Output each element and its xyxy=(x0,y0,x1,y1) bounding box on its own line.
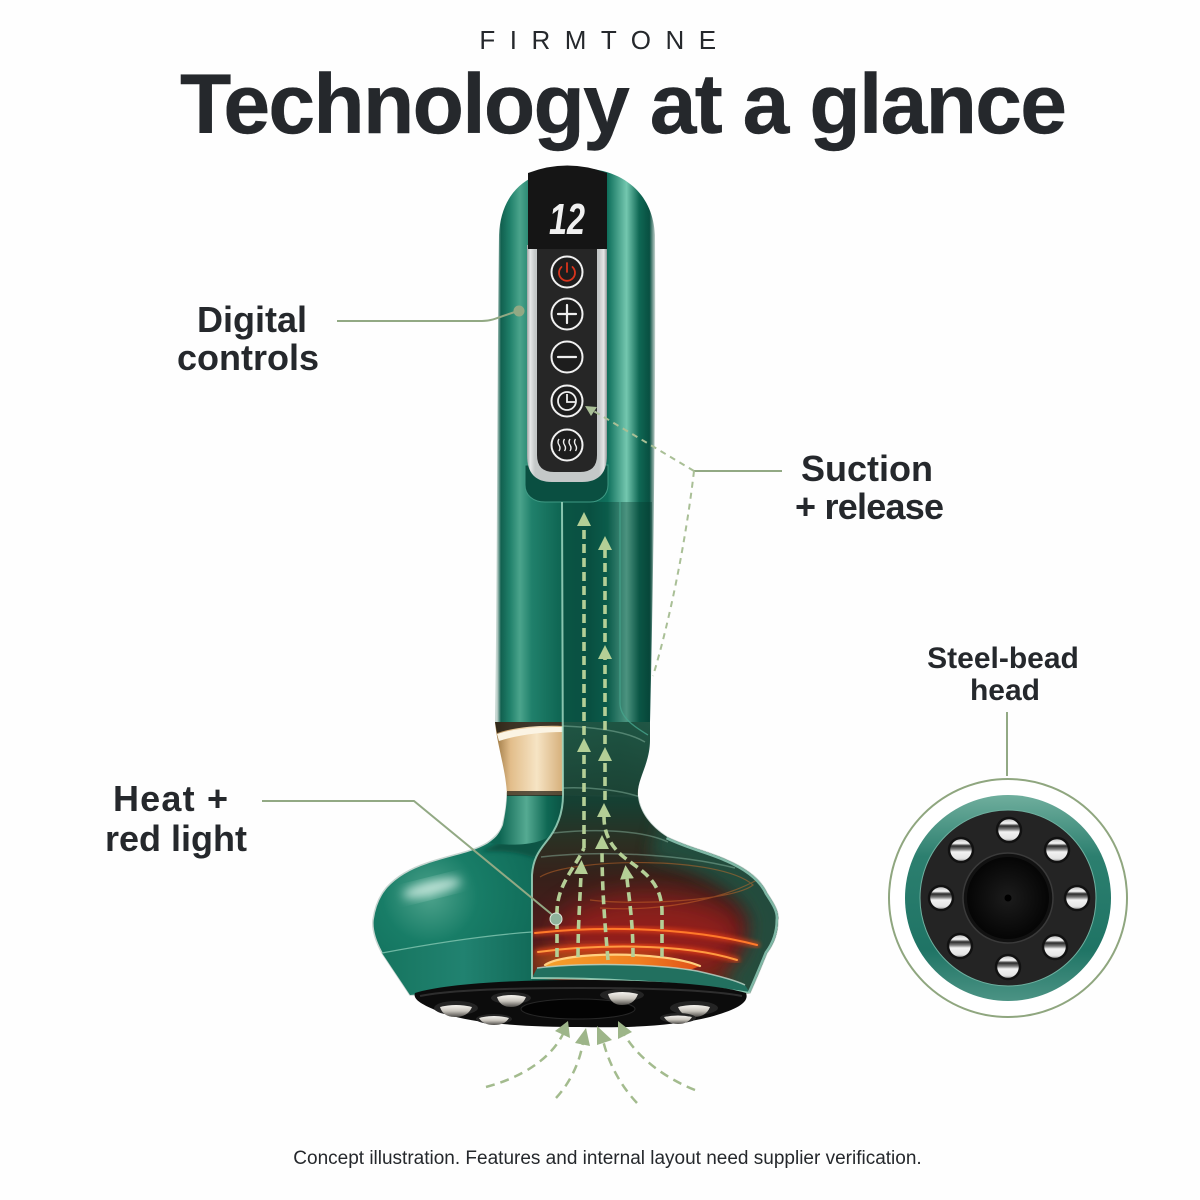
chamber contours xyxy=(541,726,735,868)
product: massager device xyxy=(373,166,790,1027)
dashed leader to chamber xyxy=(653,471,694,676)
title: Technology at a glance xyxy=(180,57,1065,151)
panel recess xyxy=(525,465,608,502)
leader arrowhead xyxy=(585,406,597,416)
dashed leader to panel xyxy=(592,410,694,471)
cutaway interior xyxy=(530,502,790,1012)
label: suction and release xyxy=(585,406,944,676)
skirt seam xyxy=(382,932,532,953)
label: suction and release: Suction xyxy=(801,448,933,489)
head detail inset xyxy=(889,779,1127,1017)
leader line xyxy=(262,801,555,917)
beads on plate xyxy=(434,989,718,1025)
label: steel-bead head: Steel-bead xyxy=(927,642,1079,675)
faint upper heat contours xyxy=(540,863,757,909)
floor light edge xyxy=(537,965,745,985)
intake airflow arrows xyxy=(486,1021,695,1103)
label: heat and red light: Heat + xyxy=(113,778,228,819)
right shell line xyxy=(620,502,648,735)
footnote: Concept illustration. Features and internal layout need supplier verification. xyxy=(293,1148,922,1169)
base skirt xyxy=(382,932,532,995)
device base body xyxy=(373,793,778,995)
steel beads xyxy=(929,818,1089,979)
leader line xyxy=(694,470,782,472)
heat button xyxy=(552,430,582,460)
center suction cup xyxy=(963,853,1053,943)
label: steel-bead head xyxy=(927,642,1079,776)
heating coil rings xyxy=(535,929,757,974)
gold collar xyxy=(495,722,650,795)
red heat glow xyxy=(555,893,745,977)
leader line xyxy=(1006,712,1008,776)
leader line xyxy=(337,311,519,321)
intake arrowheads xyxy=(555,1021,632,1046)
plus button xyxy=(552,298,582,330)
label: heat and red light: red light xyxy=(105,818,247,859)
leader dot xyxy=(550,913,562,925)
orange heat pool xyxy=(530,948,670,972)
brand name: FIRMTONE xyxy=(479,25,731,55)
black bead plate xyxy=(415,980,747,1027)
chamber floor xyxy=(532,965,750,993)
outer dark green shell xyxy=(655,836,772,995)
label: steel-bead head: head xyxy=(970,674,1040,707)
label: heat and red light xyxy=(105,778,562,925)
power button xyxy=(552,256,582,288)
label: digital controls: controls xyxy=(177,337,319,378)
label: digital controls xyxy=(177,299,524,378)
gold collar light band xyxy=(497,727,563,741)
cut edge outline xyxy=(532,502,750,993)
minus button xyxy=(552,342,582,372)
display block xyxy=(528,166,607,249)
gold collar rim xyxy=(495,722,563,733)
plate rim xyxy=(420,988,742,996)
suction opening xyxy=(521,999,635,1019)
silver bezel xyxy=(527,245,607,482)
label: suction and release: + release xyxy=(795,486,944,527)
label: digital controls: Digital xyxy=(197,299,307,340)
base shoulder sheen xyxy=(480,835,552,858)
gold collar lower rim xyxy=(507,791,563,796)
shell rim highlight xyxy=(667,837,778,993)
timer button xyxy=(552,386,582,416)
device neck xyxy=(490,793,563,845)
timer readout: 12 xyxy=(549,195,585,244)
handle dark cutaway tint xyxy=(563,502,652,722)
teal shell ring xyxy=(905,795,1111,1001)
black plate xyxy=(920,810,1096,986)
internal airflow arrows xyxy=(557,526,662,960)
device handle xyxy=(495,168,655,722)
leader dot xyxy=(514,306,524,316)
control panel xyxy=(527,166,607,482)
panel face xyxy=(537,245,597,472)
base highlight xyxy=(401,874,463,902)
